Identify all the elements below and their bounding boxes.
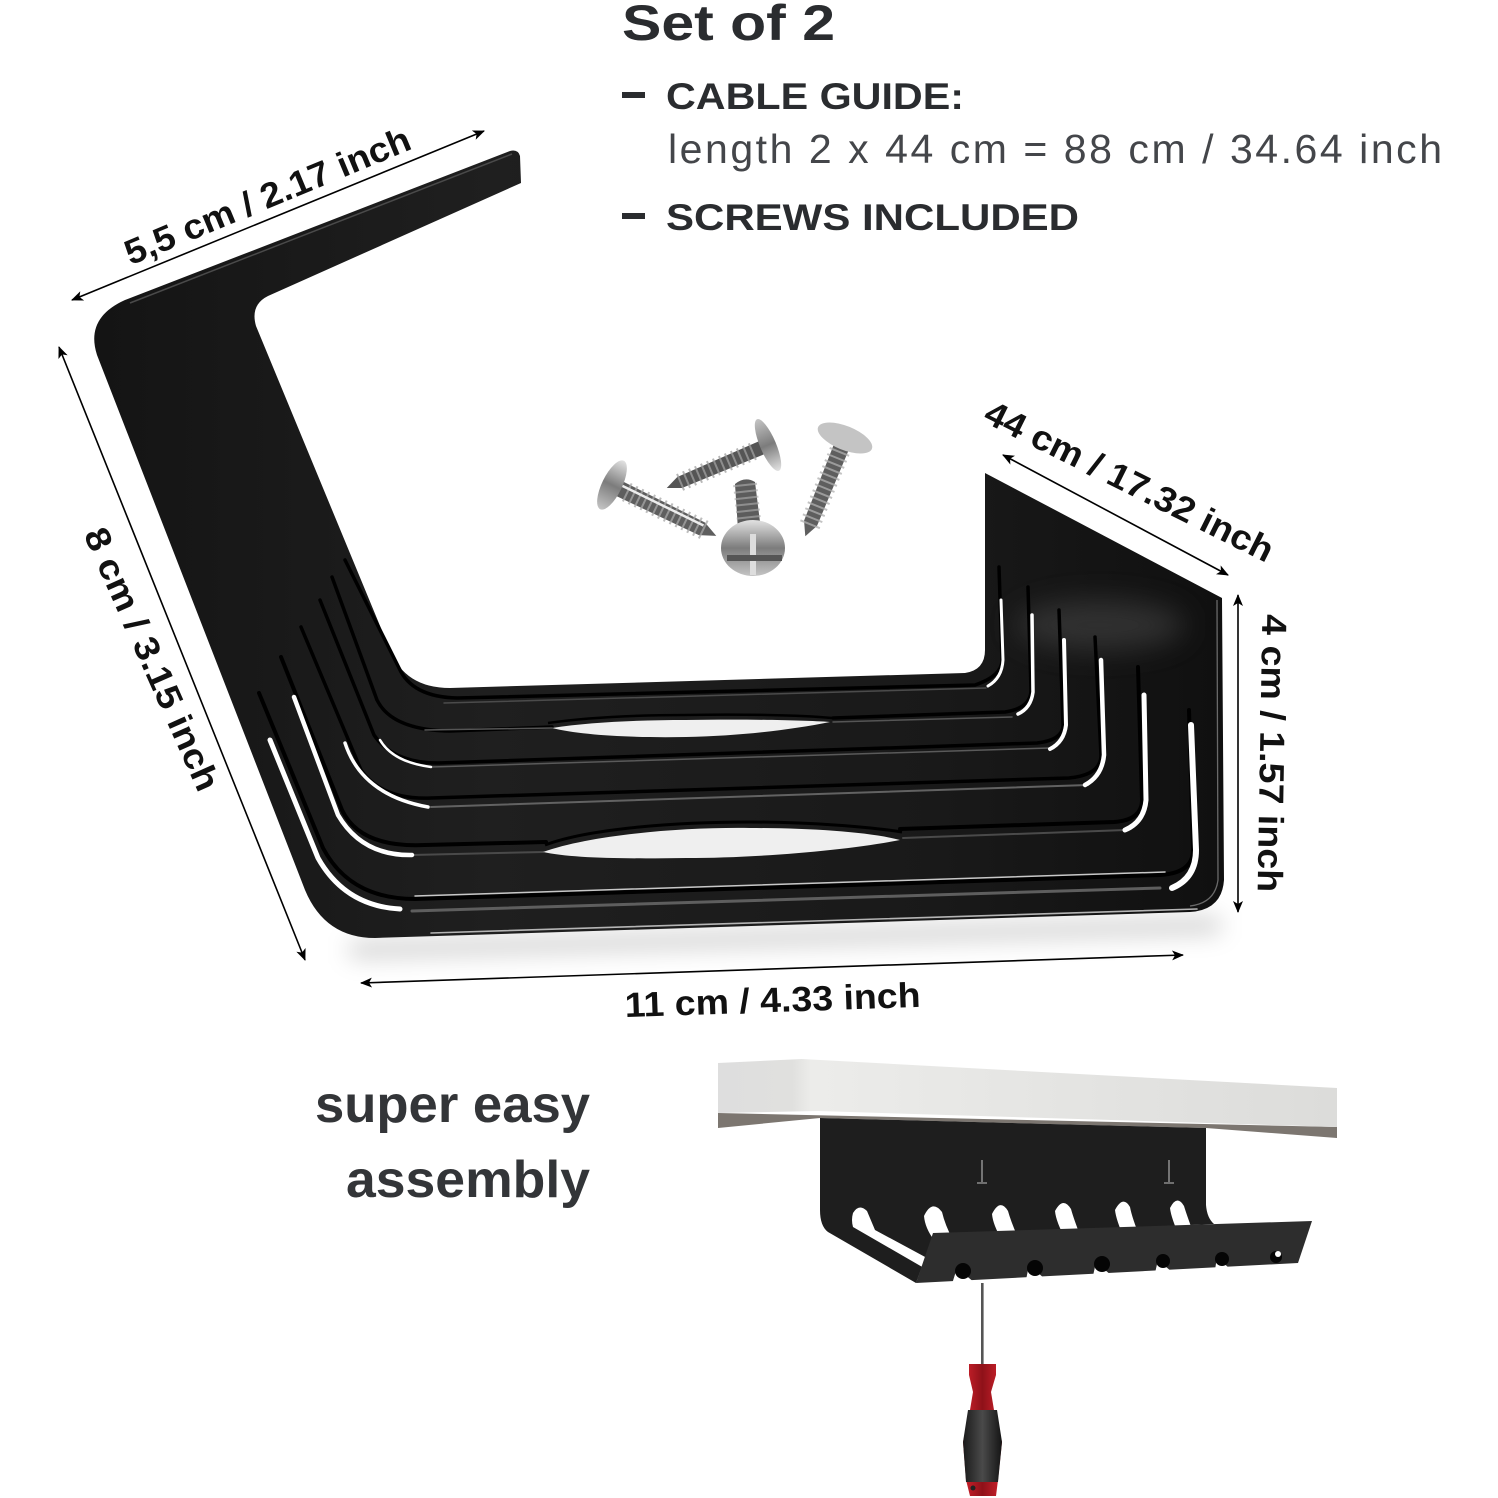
arrow: width 5.5 cm [72, 131, 484, 300]
notch gaps [952, 1257, 1230, 1284]
screws [591, 416, 876, 576]
desk top [718, 1059, 1337, 1127]
screw: top middle [656, 416, 786, 514]
slots [852, 1200, 1196, 1268]
bracket wall sheen [1015, 600, 1185, 650]
screwdriver [963, 1283, 1002, 1496]
text: super easy assembly: assembly [346, 1151, 590, 1209]
arrow: height 4 cm [1237, 595, 1239, 912]
heading: screws included: SCREWS INCLUDED [666, 197, 1079, 238]
shadow under bracket [350, 925, 1220, 950]
label: 8 cm: 8 cm / 3.15 inch [76, 522, 227, 797]
label: 5,5 cm: 5,5 cm / 2.17 inch [119, 120, 416, 273]
lens opening small [552, 720, 830, 737]
top tip highlight [130, 154, 512, 303]
text: super easy assembly: super easy [315, 1076, 590, 1134]
small screws on guide [977, 1160, 1174, 1183]
feature list [622, 76, 1442, 238]
screw: left [591, 456, 728, 560]
white gaps [270, 600, 1196, 909]
mounted guide back [820, 1118, 1214, 1283]
front flange [916, 1221, 1312, 1283]
cable guide bracket [94, 151, 1224, 938]
assembly illustration [718, 1059, 1337, 1496]
heading: cable guide: CABLE GUIDE: [666, 76, 964, 117]
grey tails [444, 688, 986, 703]
bracket body [94, 151, 1224, 938]
notch hole [1275, 1251, 1281, 1257]
label: 44 cm: 44 cm / 17.32 inch [978, 393, 1280, 570]
screw: front [721, 479, 785, 576]
screw: right [778, 416, 876, 547]
bullet: cable guide [622, 92, 645, 98]
right edge gloss [1190, 600, 1218, 906]
text: super easy assembly [315, 1076, 590, 1209]
label: 4 cm: 4 cm / 1.57 inch [1250, 614, 1293, 893]
lens opening large [543, 828, 900, 858]
arrow: height 8 cm [59, 347, 305, 960]
notches [955, 1251, 1282, 1279]
desk underside [718, 1113, 1337, 1138]
label: 11 cm: 11 cm / 4.33 inch [624, 976, 921, 1025]
bullet: screws [622, 213, 645, 219]
text: length: length 2 x 44 cm = 88 cm / 34.64 inch [668, 126, 1442, 172]
dimension arrows [59, 131, 1238, 983]
arrow: width 11 cm [361, 955, 1183, 983]
arrow: length 44 cm [1003, 455, 1228, 575]
slits [259, 560, 1197, 933]
